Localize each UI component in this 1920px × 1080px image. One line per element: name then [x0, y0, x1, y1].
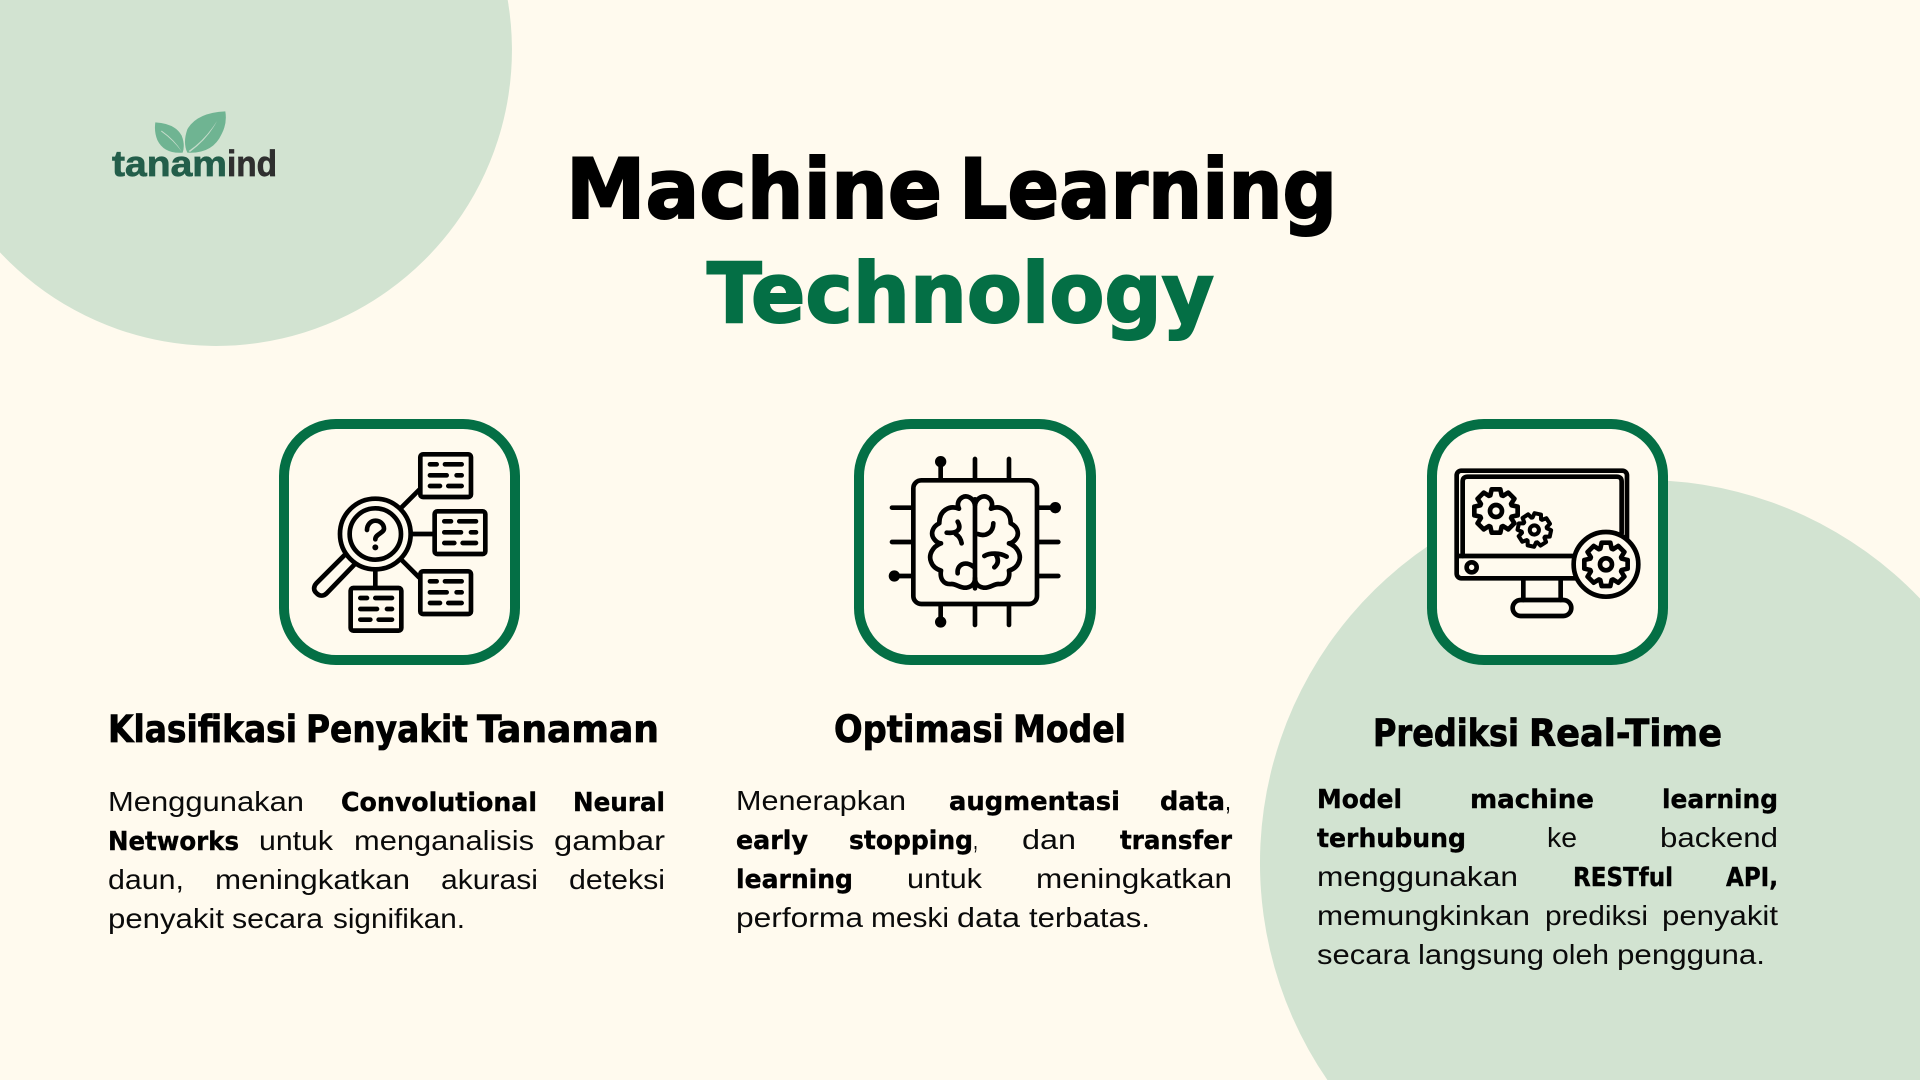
title: Learning — [959, 141, 1337, 238]
background circle: top left — [0, 0, 512, 346]
body text: RESTful — [1573, 863, 1673, 893]
body text: meningkatkan — [215, 864, 410, 895]
body text: secara — [232, 903, 323, 934]
body text: untuk — [259, 825, 334, 856]
body text: Model — [1317, 785, 1402, 815]
body text: Networks — [108, 827, 239, 857]
heading: Prediksi — [1373, 712, 1519, 755]
body text: Neural — [573, 788, 665, 818]
body text: langsung — [1418, 939, 1544, 970]
body text: dan — [1022, 824, 1076, 855]
logo wordmark: tanam — [112, 143, 227, 184]
body text — [736, 785, 1232, 933]
body text: prediksi — [1545, 900, 1648, 931]
heading: Model — [1013, 708, 1126, 751]
body text: Menggunakan — [108, 786, 304, 817]
body text: penyakit — [1662, 900, 1778, 931]
body text: signifikan. — [333, 903, 465, 934]
heading: Tanaman — [477, 708, 659, 751]
body text: deteksi — [569, 864, 665, 895]
body text: learning — [1662, 785, 1778, 815]
body text: data — [957, 902, 1020, 933]
body text: API, — [1726, 863, 1778, 893]
icon box: brain chip — [859, 424, 1091, 660]
heading — [834, 708, 1126, 751]
body text: ke — [1547, 822, 1577, 853]
body text: daun, — [108, 864, 184, 895]
body text: transfer — [1120, 826, 1232, 856]
body text: menggunakan — [1317, 861, 1518, 892]
panel: optimasi model — [736, 424, 1232, 933]
background circle: bottom right — [1260, 480, 1920, 1080]
body text: akurasi — [441, 864, 538, 895]
body text: early — [736, 826, 808, 856]
body text: penyakit — [108, 903, 224, 934]
heading: Real-Time — [1529, 712, 1722, 755]
body text: data — [1160, 787, 1225, 817]
heading — [108, 708, 659, 751]
title: Machine — [566, 141, 942, 238]
icon box: magnifier with documents — [284, 424, 515, 660]
body text: backend — [1660, 822, 1778, 853]
body text: , — [1225, 785, 1231, 816]
icon: leaves — [155, 111, 226, 153]
body text: learning — [736, 865, 853, 895]
body text: meningkatkan — [1036, 863, 1232, 894]
logo wordmark: ind — [227, 143, 277, 184]
body text: untuk — [907, 863, 983, 894]
body text: meski — [871, 902, 949, 933]
body text: menganalisis — [354, 825, 534, 856]
body text: memungkinkan — [1317, 900, 1530, 931]
body text: oleh — [1552, 939, 1609, 970]
body text: stopping — [849, 826, 973, 856]
panel: prediksi real-time — [1317, 424, 1778, 970]
heading: Optimasi — [834, 708, 1004, 751]
panel: klasifikasi penyakit tanaman — [108, 424, 665, 934]
body text: gambar — [554, 825, 665, 856]
logo: tanamind — [112, 111, 277, 184]
body text: Menerapkan — [736, 785, 906, 816]
heading: Penyakit — [306, 708, 468, 751]
heading — [1373, 712, 1722, 755]
title — [566, 141, 1337, 342]
body text: terhubung — [1317, 824, 1466, 854]
body text: terbatas. — [1029, 902, 1150, 933]
body text: , — [973, 824, 978, 855]
icon box: monitor with gears — [1432, 424, 1663, 660]
heading: Klasifikasi — [108, 708, 297, 751]
title: Technology — [707, 245, 1214, 342]
body text: machine — [1470, 785, 1594, 815]
body text: secara — [1317, 939, 1410, 970]
body text: performa — [736, 902, 863, 933]
body text — [1317, 785, 1778, 970]
body text: Convolutional — [341, 788, 537, 818]
body text: augmentasi — [949, 787, 1120, 817]
body text — [108, 786, 665, 934]
body text: pengguna. — [1617, 939, 1765, 970]
